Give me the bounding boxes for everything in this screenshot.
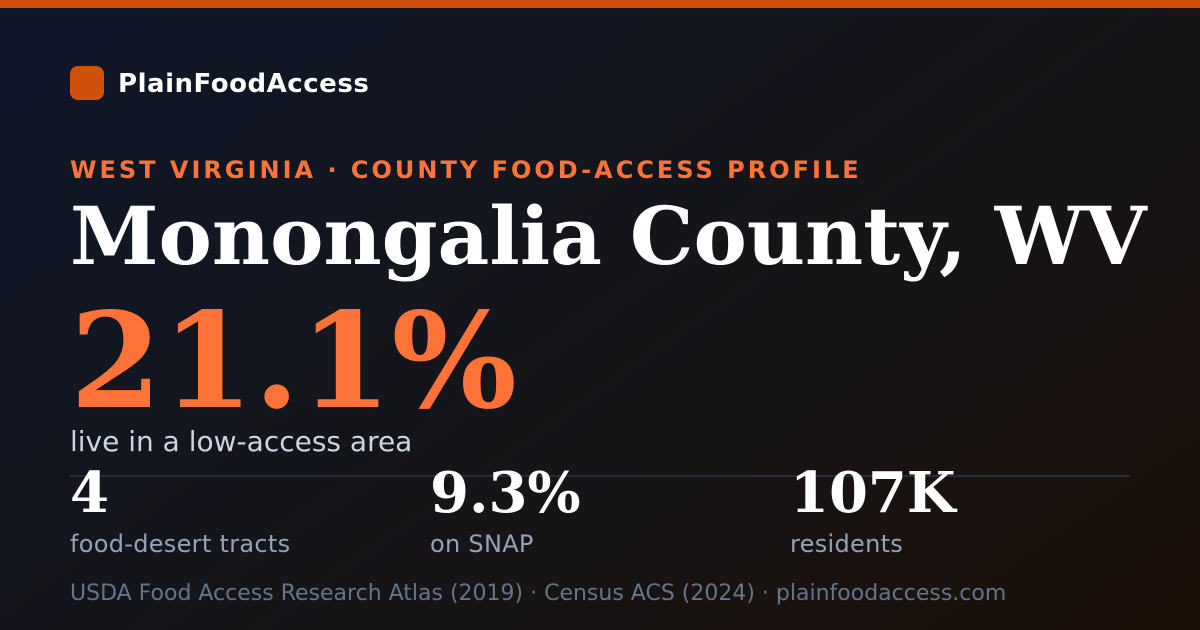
source footer: USDA Food Access Research Atlas (2019) · Census ACS (2024) · plainfoodaccess.com — [70, 581, 1006, 606]
stat: on SNAP — [430, 460, 581, 558]
logo icon — [70, 66, 104, 100]
divider — [70, 475, 1130, 477]
stat value: 9.3% — [430, 460, 581, 526]
eyebrow: WEST VIRGINIA · COUNTY FOOD-ACCESS PROFILE — [70, 156, 862, 184]
title: Monongalia County, WV — [70, 189, 1147, 283]
headline stat: 21.1% — [70, 284, 517, 439]
stat label: food-desert tracts — [70, 530, 290, 558]
stat value: 107K — [790, 460, 956, 526]
stat: food-desert tracts — [70, 460, 290, 558]
brand name: PlainFoodAccess — [118, 69, 369, 99]
stat label: on SNAP — [430, 530, 534, 558]
stat label: residents — [790, 530, 903, 558]
headline stat label: live in a low-access area — [70, 425, 412, 458]
stat: residents — [790, 460, 958, 558]
top accent bar — [0, 0, 1200, 8]
stat value: 4 — [70, 460, 109, 526]
